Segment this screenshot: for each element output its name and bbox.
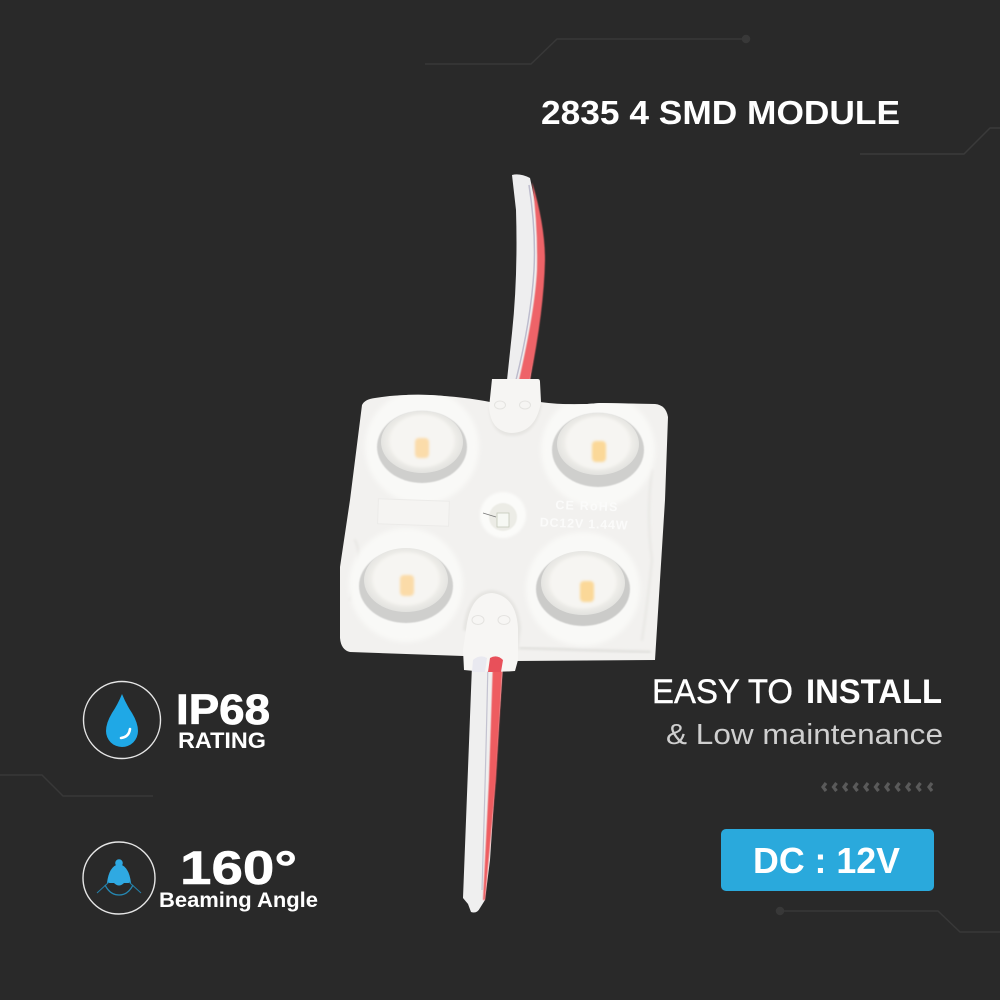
easy to install heading: EASY TO (652, 673, 793, 711)
decorative chevrons (823, 783, 932, 791)
circuit line: left (0, 775, 153, 796)
LED top left (377, 411, 467, 483)
circuit line: upper right (860, 128, 1000, 154)
IP68 label: IP68 (176, 686, 270, 734)
voltage badge (721, 829, 934, 891)
feature: 160 degree beam angle (83, 841, 318, 914)
title: 2835 4 SMD MODULE (541, 94, 900, 131)
rating label: RATING (178, 728, 266, 753)
center contact (480, 492, 526, 538)
top wires (507, 174, 545, 380)
beaming angle label: Beaming Angle (159, 889, 318, 912)
circuit line: top (425, 36, 750, 64)
LED bottom left (359, 548, 453, 623)
bottom wires (463, 660, 503, 912)
circuit line: bottom right (776, 908, 1000, 932)
embossed marking: DC12V 1.44W (539, 515, 629, 533)
feature: IP68 rating (84, 682, 270, 758)
icon: water drop (84, 682, 160, 758)
top connector (489, 379, 542, 436)
embossed marking (539, 497, 629, 533)
LED top right (552, 413, 644, 487)
product photo: LED module (340, 174, 668, 912)
embossed label box (378, 499, 449, 526)
LED bottom right (536, 551, 630, 626)
160 degree label: 160° (180, 841, 297, 894)
voltage badge: DC : 12V (753, 840, 900, 881)
icon: beam angle lamp (83, 842, 155, 914)
body shading (349, 390, 655, 652)
easy to install heading: INSTALL (806, 673, 942, 711)
bottom connector (463, 590, 521, 672)
low maintenance subheading: & Low maintenance (666, 719, 943, 751)
wire stubs at bottom connector (472, 656, 503, 672)
easy to install heading (652, 673, 942, 711)
module body (340, 395, 668, 661)
embossed marking: CE RoHS (555, 498, 619, 514)
